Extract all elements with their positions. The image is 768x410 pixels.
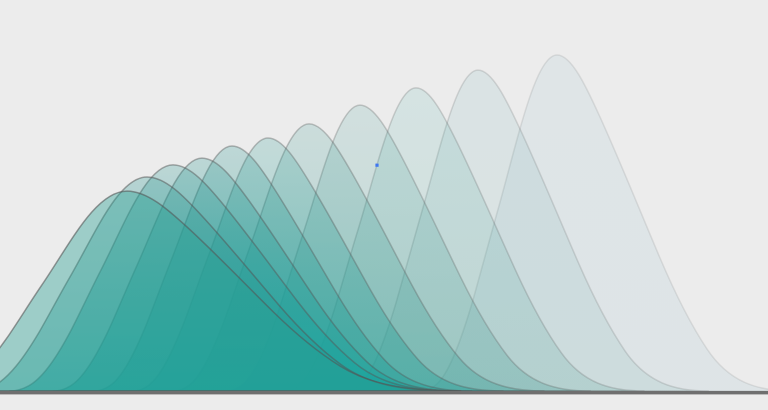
curve 9 [10, 165, 457, 391]
curve 6 [133, 138, 503, 391]
baseline [0, 391, 768, 394]
curve 7 [94, 146, 472, 391]
curve 3 [285, 88, 644, 391]
curve 2 [346, 70, 708, 391]
curve 1: rightmost, tallest [422, 55, 768, 391]
curve 11: front, shortest [0, 191, 461, 391]
curve 4 [228, 105, 590, 391]
curve 8 [53, 158, 460, 391]
curve 10 [0, 177, 450, 391]
curve 5 [174, 124, 544, 391]
blue marker dot [375, 164, 379, 167]
